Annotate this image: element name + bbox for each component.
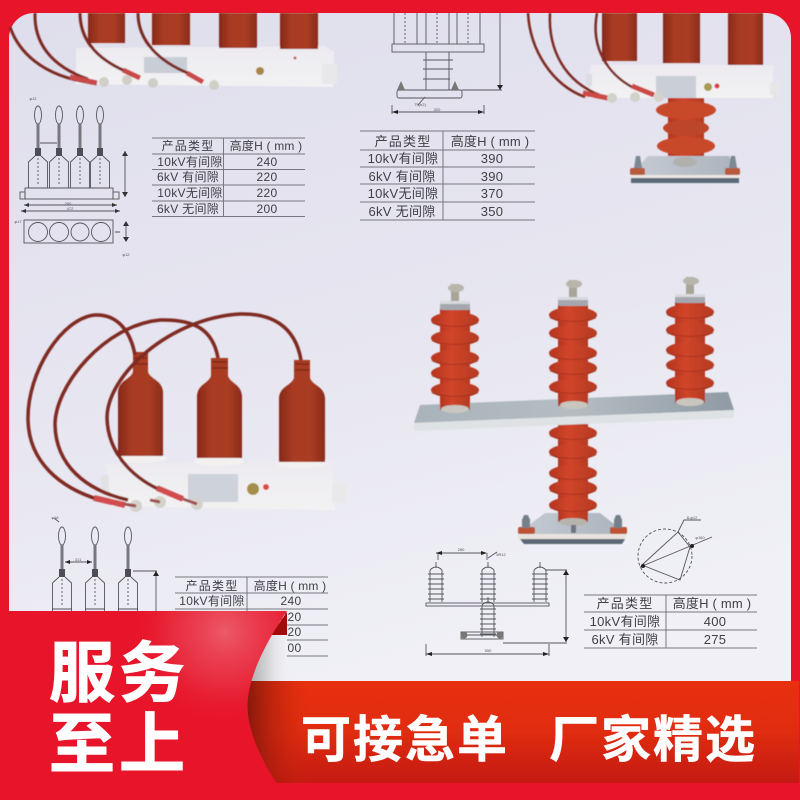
table: top-left sizes: 6kV 无间隙	[157, 202, 219, 216]
table: lower-right sizes: 6kV 有间隙	[591, 632, 659, 647]
diagram: lower-centre dimension drawing: 280	[458, 547, 465, 552]
right banner	[240, 681, 800, 800]
upper insulator centre	[549, 280, 597, 409]
table: top-centre sizes: 高度H ( mm )	[451, 134, 529, 149]
table: top-left sizes	[152, 138, 305, 216]
diagram: lower-centre dimension drawing: 550	[485, 648, 492, 653]
diagram: lower-centre dimension drawing: 5R12	[496, 552, 507, 557]
table: lower-right sizes: 产品类型	[597, 596, 653, 611]
table: top-centre sizes: 6kV 无间隙	[368, 204, 436, 219]
table: lower-left sizes (partly covered): 220	[281, 610, 301, 624]
table: top-left sizes: 产品类型	[162, 139, 214, 153]
diagram: lower-left dimension drawing: 311	[75, 557, 82, 562]
table: top-centre sizes: 产品类型	[375, 134, 431, 149]
lower insulator and base plate	[517, 424, 627, 544]
diagram: top-left dimension drawing	[14, 96, 130, 257]
table: lower-right sizes: 275	[704, 632, 726, 647]
table: top-left sizes: 200	[257, 202, 277, 216]
table: lower-right sizes: 400	[704, 614, 726, 629]
table: lower-left sizes (partly covered)	[175, 577, 328, 656]
slogan: 可接急单 厂家精选: 厂家精选	[549, 712, 757, 768]
table: lower-left sizes (partly covered): 200	[281, 641, 301, 655]
headline: 服务至上: 服务	[49, 636, 189, 710]
diagram: top-centre dimension drawing: 320	[434, 107, 441, 112]
grey fold shadow	[245, 635, 287, 682]
table: top-centre sizes: 6kV 有间隙	[368, 169, 436, 184]
left banner	[0, 611, 288, 800]
table: top-centre sizes: 10kV无间隙	[368, 186, 438, 201]
upper insulator left	[431, 284, 479, 413]
upper insulator right	[666, 277, 714, 406]
table: top-left sizes: 220	[257, 186, 277, 200]
table: top-centre sizes	[360, 131, 535, 220]
table: lower-right sizes	[584, 595, 757, 648]
diagram: lower-left dimension drawing	[51, 515, 159, 612]
table: top-left sizes: 10kV无间隙	[157, 186, 223, 200]
diagram: lower-left dimension drawing: φ18	[51, 515, 59, 520]
table: top-left sizes: 6kV 有间隙	[157, 170, 219, 184]
table: lower-left sizes (partly covered): 产品类型	[186, 579, 238, 593]
table: top-left sizes: 220	[257, 170, 277, 184]
device: insulators on steel bar	[414, 277, 734, 544]
diagram: triangular base plate	[638, 515, 712, 583]
device: top-left surge protector	[10, 13, 337, 90]
diagram: top-left dimension drawing: 472	[67, 206, 74, 211]
slogan: 可接急单 厂家精选: 可接急单	[301, 712, 509, 768]
table: lower-right sizes: 高度H ( mm )	[673, 596, 751, 611]
diagram: triangular base plate: 8-φ12	[687, 515, 698, 520]
diagram: top-left dimension drawing: φ12	[122, 252, 130, 257]
table: lower-left sizes (partly covered): 高度H ( mm )	[254, 578, 326, 593]
device: top-right surge protector on insulator	[528, 13, 779, 183]
table: lower-left sizes (partly covered): 240	[281, 594, 301, 608]
table: top-centre sizes: 350	[481, 204, 503, 219]
diagram: top-centre dimension drawing	[392, 13, 503, 114]
diagram: lower-centre dimension drawing	[426, 547, 569, 656]
table: top-left sizes: 10kV有间隙	[157, 155, 223, 169]
diagram: top-left dimension drawing: φ12	[29, 96, 37, 101]
diagram: top-left dimension drawing: φ17	[14, 219, 22, 224]
table: top-centre sizes: 370	[481, 186, 503, 201]
headline: 服务至上	[49, 636, 189, 781]
table: top-centre sizes: 10kV有间隙	[368, 151, 438, 166]
diagram: top-left dimension drawing: 280	[65, 201, 72, 206]
table: top-left sizes: 240	[257, 155, 277, 169]
diagram: top-centre dimension drawing: 75(h2)	[414, 102, 426, 107]
table: top-centre sizes: 390	[481, 169, 503, 184]
table: lower-right sizes: 10kV有间隙	[590, 614, 660, 629]
table: top-centre sizes: 390	[481, 151, 503, 166]
headline: 服务至上: 至上	[49, 707, 189, 781]
diagram: triangular base plate: φ160	[695, 535, 705, 540]
fold corner	[271, 612, 287, 635]
table: top-left sizes: 高度H ( mm )	[230, 138, 302, 153]
slogan: 可接急单 厂家精选	[301, 712, 757, 768]
table: lower-left sizes (partly covered): 10kV有间隙	[179, 594, 245, 608]
table: lower-left sizes (partly covered): 220	[281, 625, 301, 639]
device: three-phase surge protector	[28, 314, 347, 512]
steel bar	[414, 392, 734, 431]
